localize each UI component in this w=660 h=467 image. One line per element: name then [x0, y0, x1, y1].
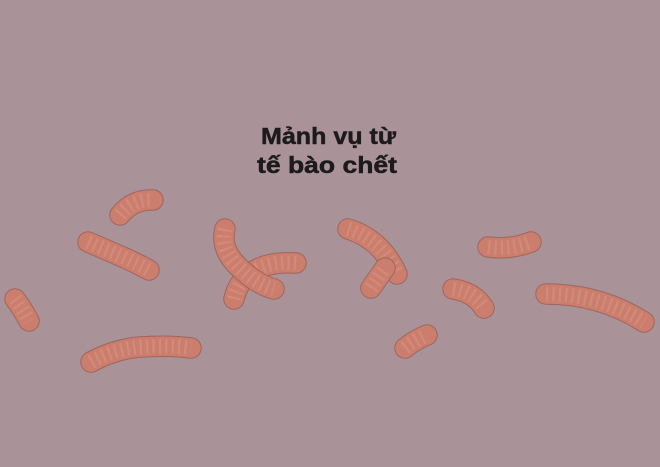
debris worm: centre crossing curve [224, 229, 274, 289]
debris worm: far right long [546, 294, 644, 322]
debris worm: left diagonal [88, 242, 149, 270]
debris worm: centre right long [348, 229, 397, 274]
title: tế bào chết [257, 152, 397, 178]
debris worm: upper left short [120, 200, 153, 215]
debris worm: centre right short overlapping [371, 268, 385, 288]
debris worm: far left small [15, 299, 29, 321]
debris worm: middle right arc [453, 289, 484, 308]
debris worm: centre lower arc [234, 263, 296, 299]
debris worm: bottom left long [91, 346, 191, 362]
title: Mảnh vụ từ [261, 123, 397, 149]
debris worm: upper right [488, 242, 531, 248]
debris worm: lower middle short [405, 335, 427, 348]
